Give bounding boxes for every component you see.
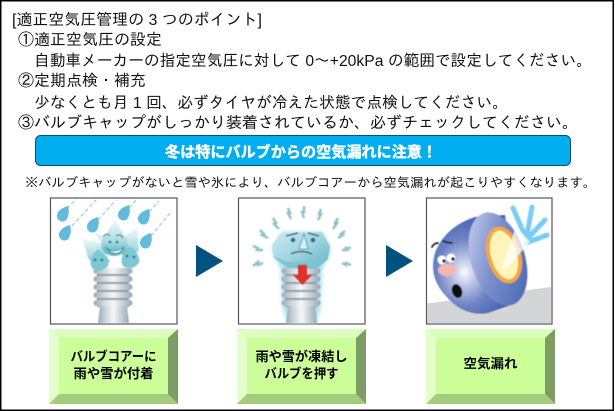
icon: water drop characters — [82, 220, 139, 271]
text block: point list: 少なくとも月 1 回、必ずタイヤが冷えた状態で点検してください。 — [34, 94, 508, 112]
panel: water on valve core — [50, 198, 177, 324]
callout banner: winter warning: 冬は特にバルブからの空気漏れに注意！ — [165, 141, 437, 162]
text block: point list — [18, 31, 592, 132]
rain streaks — [67, 199, 171, 236]
icon: valve body — [282, 268, 320, 323]
panel: ice pushes valve — [238, 198, 365, 324]
label box: air leak: 空気漏れ — [464, 353, 518, 372]
icon: rain drops — [57, 205, 152, 248]
icon: valve body — [94, 268, 132, 323]
text block: point list: ③バルブキャップがしっかり装着されているか、必ずチェックしてください。 — [18, 114, 578, 132]
note text: ※バルブキャップがないと雪や氷により、バルブコアーから空気漏れが起こりやすくなります。 — [25, 175, 596, 189]
road surface — [427, 287, 551, 323]
label box: water freezes and pushes valve: バルブを押す — [264, 363, 338, 382]
icon: frozen head with face — [272, 232, 330, 269]
icon: cold sparks — [253, 206, 351, 266]
label box: water adheres to valve core: 雨や雪が付着 — [74, 363, 154, 382]
text block: point list: 自動車メーカーの指定空気圧に対して 0～+20kPa の範囲で設定してください。 — [34, 52, 592, 70]
label box: air leak — [426, 329, 555, 404]
text block: point list: ②定期点検・補充 — [18, 72, 146, 90]
panel: air leak — [426, 198, 552, 324]
label box: water freezes and pushes valve: 雨や雪が凍結し — [256, 346, 348, 365]
callout banner: winter warning — [36, 136, 570, 166]
arrow — [196, 245, 223, 277]
cold glow — [272, 232, 331, 323]
icon: red down arrow — [293, 265, 312, 285]
label box: water adheres to valve core — [49, 329, 178, 404]
label box: water adheres to valve core: バルブコアーに — [70, 346, 156, 365]
text block: point list: ①適正空気圧の設定 — [18, 31, 162, 49]
icon: air jet — [513, 207, 547, 243]
label box: water freezes and pushes valve — [237, 329, 366, 404]
heading: three points of proper tyre pressure: [適正空気圧管理の 3 つのポイント] — [12, 11, 262, 29]
icon: tyre character — [432, 205, 538, 314]
arrow — [386, 245, 413, 277]
